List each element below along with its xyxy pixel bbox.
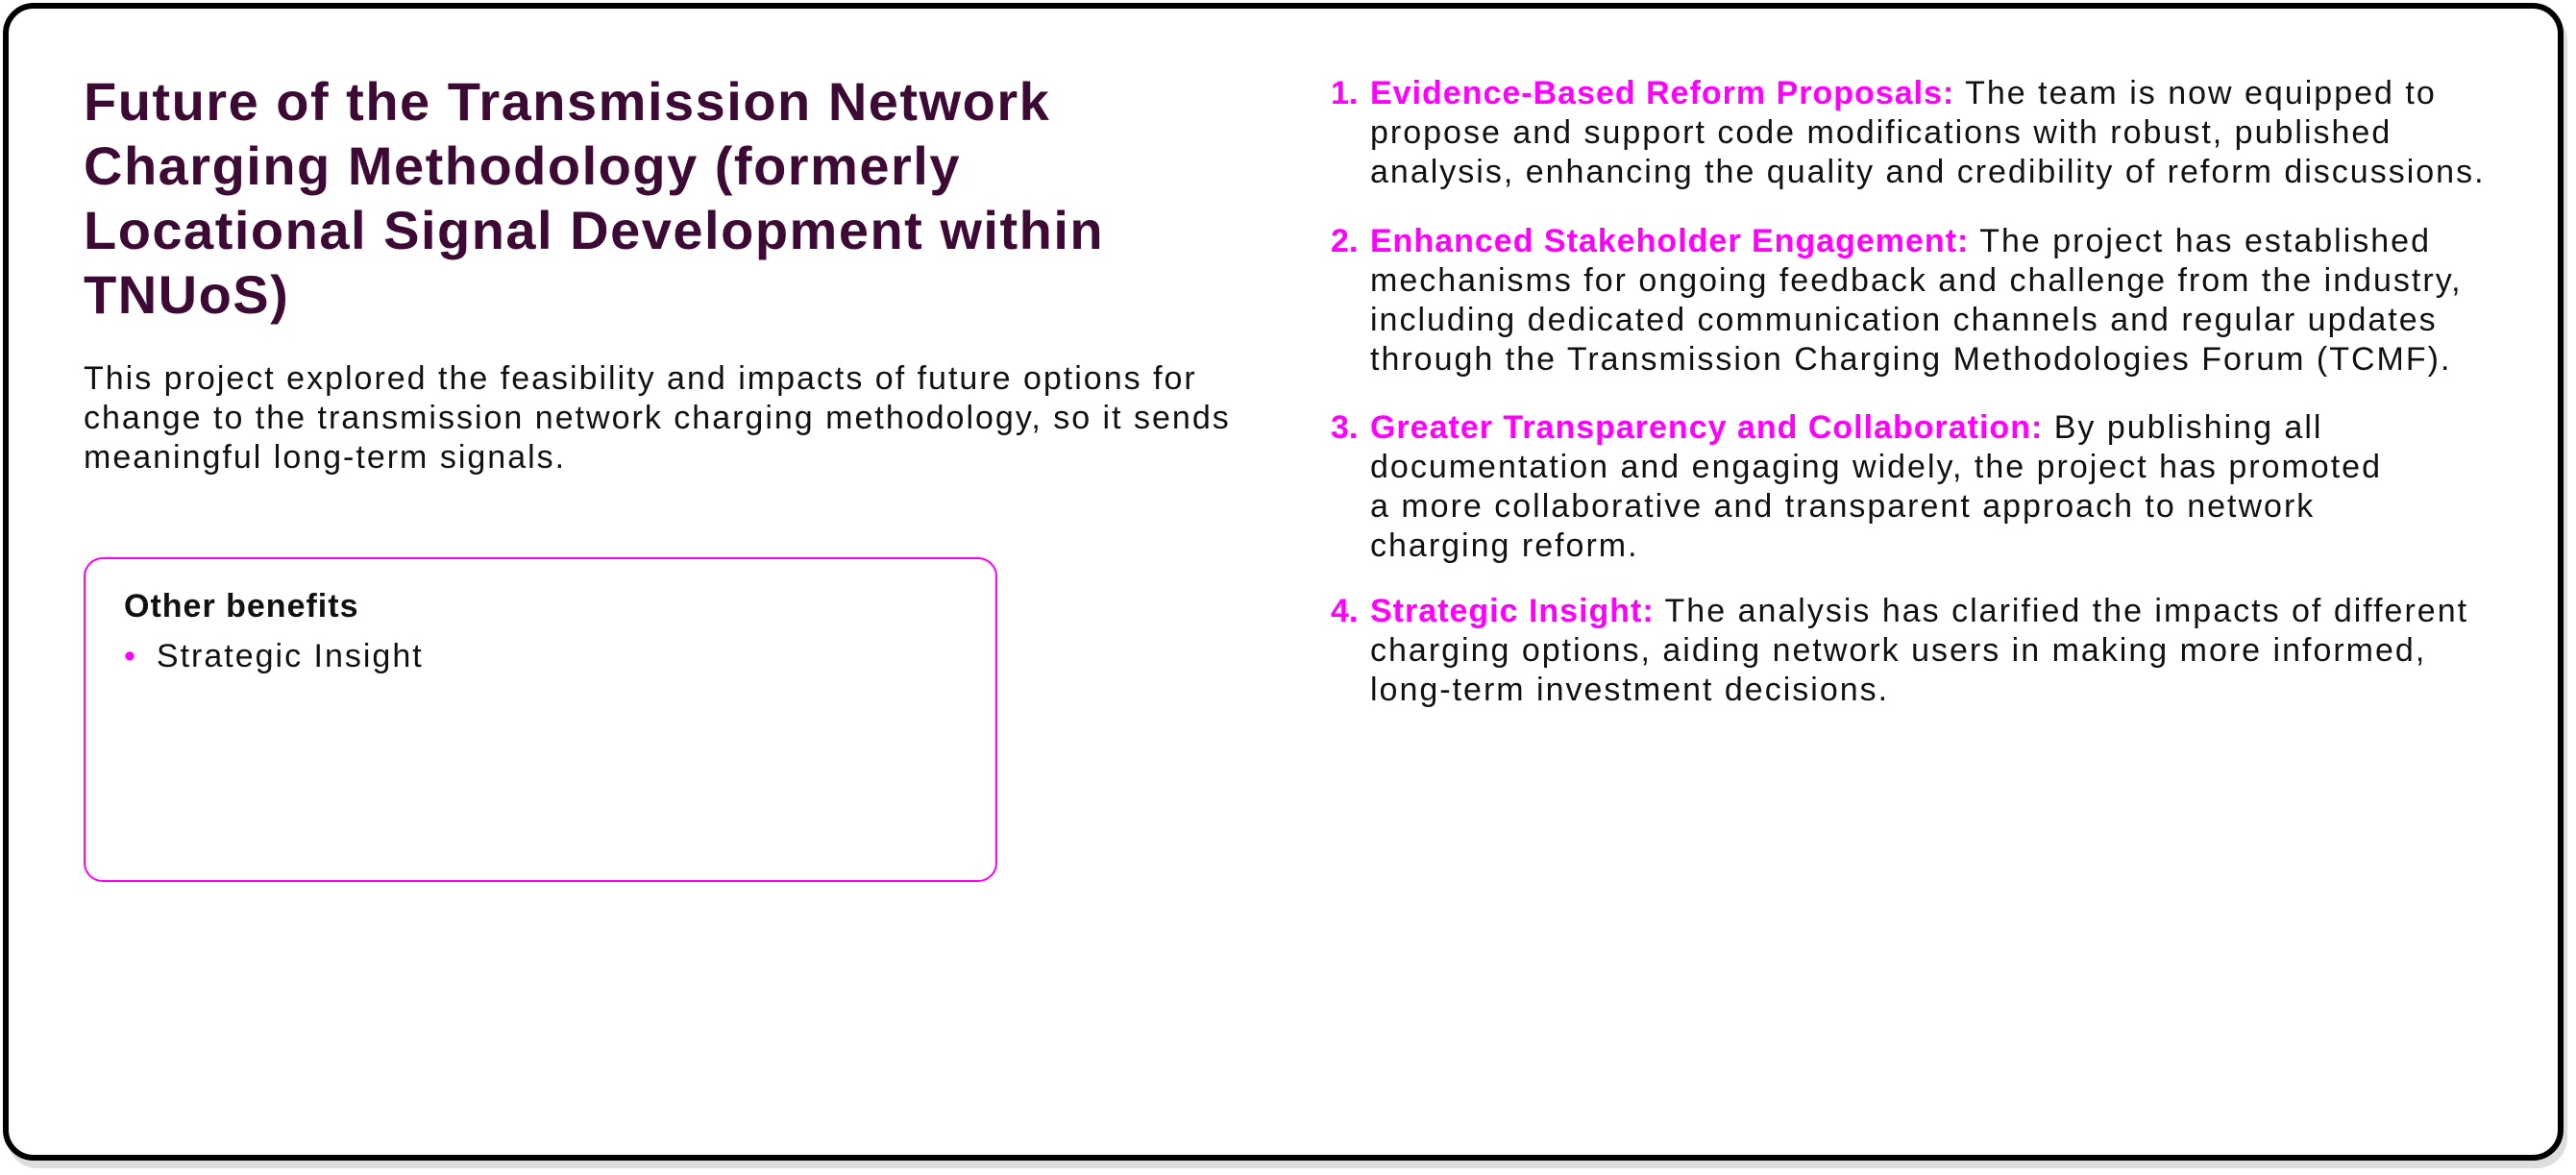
list item 1: 1.	[1331, 75, 1358, 111]
list item 4: charging options, aiding network users in making more informed,	[1370, 632, 2426, 669]
list item 4: 4.	[1331, 593, 1358, 629]
heading: other benefits: Other benefits	[124, 588, 358, 624]
list item 1: Evidence-Based Reform Proposals: The team is now equipped to	[1370, 75, 2437, 111]
list item 4	[1331, 593, 2468, 708]
panel: other benefits	[84, 557, 997, 882]
list item 1: propose and support code modifications with robust, published	[1370, 114, 2392, 151]
list item 3	[1331, 409, 2382, 564]
list item 2: 2.	[1331, 223, 1358, 259]
list item 3: a more collaborative and transparent approach to network	[1370, 488, 2315, 525]
list item 2: including dedicated communication channels and regular updates	[1370, 302, 2438, 338]
title: Charging Methodology (formerly	[84, 135, 961, 196]
list item 3: documentation and engaging widely, the project has promoted	[1370, 449, 2382, 485]
list item 1: analysis, enhancing the quality and credibility of reform discussions.	[1370, 154, 2486, 190]
list item 2: through the Transmission Charging Methodologies Forum (TCMF).	[1370, 341, 2451, 378]
list item 3: 3.	[1331, 409, 1358, 446]
list item 2: Enhanced Stakeholder Engagement: The project has established	[1370, 223, 2431, 259]
list item 3: Greater Transparency and Collaboration: By publishing all	[1370, 409, 2322, 446]
description: meaningful long-term signals.	[84, 439, 566, 476]
title: Locational Signal Development within	[84, 200, 1104, 260]
description: This project explored the feasibility and impacts of future options for	[84, 360, 1197, 397]
description	[84, 360, 1231, 476]
list item 4: long-term investment decisions.	[1370, 672, 1889, 708]
list item 2	[1331, 223, 2463, 378]
title	[84, 71, 1104, 325]
list item 1	[1331, 75, 2486, 190]
list item 4: Strategic Insight: The analysis has clarified the impacts of different	[1370, 593, 2468, 629]
description: change to the transmission network charging methodology, so it sends	[84, 400, 1231, 436]
list item 2: mechanisms for ongoing feedback and challenge from the industry,	[1370, 262, 2463, 299]
list item 3: charging reform.	[1370, 527, 1639, 564]
bullet item: • Strategic Insight	[124, 638, 424, 674]
title: Future of the Transmission Network	[84, 71, 1050, 132]
title: TNUoS)	[84, 264, 289, 325]
